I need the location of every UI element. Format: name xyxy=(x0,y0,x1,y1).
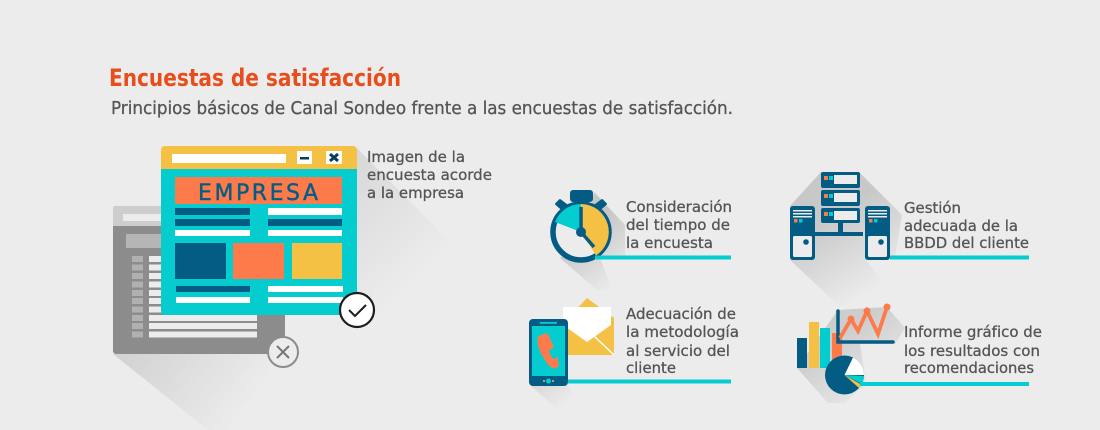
item: tiempo de la encuesta xyxy=(553,190,732,290)
subtitle: Principios básicos de Canal Sondeo frente a las encuestas de satisfacción. xyxy=(111,98,733,119)
text xyxy=(626,198,732,252)
text: survey image caption xyxy=(367,148,492,202)
text xyxy=(904,323,1042,377)
underline xyxy=(890,256,1029,260)
icon: handset xyxy=(538,334,558,368)
text: la metodología xyxy=(626,323,739,341)
icon: envelope xyxy=(563,298,614,355)
shadow: stopwatch xyxy=(560,192,625,290)
shadow: servers xyxy=(790,172,902,305)
text: Informe gráfico de xyxy=(904,323,1042,341)
text: BBDD del cliente xyxy=(904,234,1029,252)
icon: servers xyxy=(790,172,890,260)
icon: line chart xyxy=(838,304,893,342)
text: cliente xyxy=(626,359,676,377)
icon: check badge xyxy=(340,293,374,327)
shadow: phone xyxy=(529,384,580,410)
underline xyxy=(595,256,731,260)
logo text: EMPRESA xyxy=(198,181,318,206)
item: metodología xyxy=(529,298,739,410)
shadow: charts xyxy=(797,307,905,403)
text: Adecuación de xyxy=(626,305,736,323)
shadow: company window xyxy=(357,148,470,345)
panel: survey illustration xyxy=(113,146,470,430)
icon: bar chart xyxy=(797,322,842,368)
item: informe gráfico xyxy=(797,304,1042,403)
underline xyxy=(568,380,731,384)
window: company survey xyxy=(161,146,357,315)
icon: cross badge xyxy=(268,337,298,367)
text: del tiempo de xyxy=(626,216,730,234)
text: Gestión xyxy=(904,199,961,217)
text: al servicio del xyxy=(626,342,730,360)
text: survey image caption: encuesta acorde xyxy=(367,166,492,184)
text: los resultados con xyxy=(904,342,1040,360)
text: adecuada de la xyxy=(904,217,1018,235)
title: Encuestas de satisfacción xyxy=(109,64,401,92)
shadow: grey window xyxy=(113,354,325,430)
text: Consideración xyxy=(626,198,732,216)
icon: stopwatch xyxy=(553,190,609,260)
text: la encuesta xyxy=(626,234,713,252)
text: survey image caption: Imagen de la xyxy=(367,148,465,166)
text xyxy=(626,305,739,377)
item: base de datos xyxy=(790,172,1029,305)
text: survey image caption: a la empresa xyxy=(367,184,464,202)
window: grey rejected survey xyxy=(113,206,285,354)
text xyxy=(904,199,1029,252)
icon: smartphone xyxy=(529,319,568,386)
underline xyxy=(860,382,1029,386)
icon: pie chart xyxy=(825,356,864,394)
text: recomendaciones xyxy=(904,359,1034,377)
